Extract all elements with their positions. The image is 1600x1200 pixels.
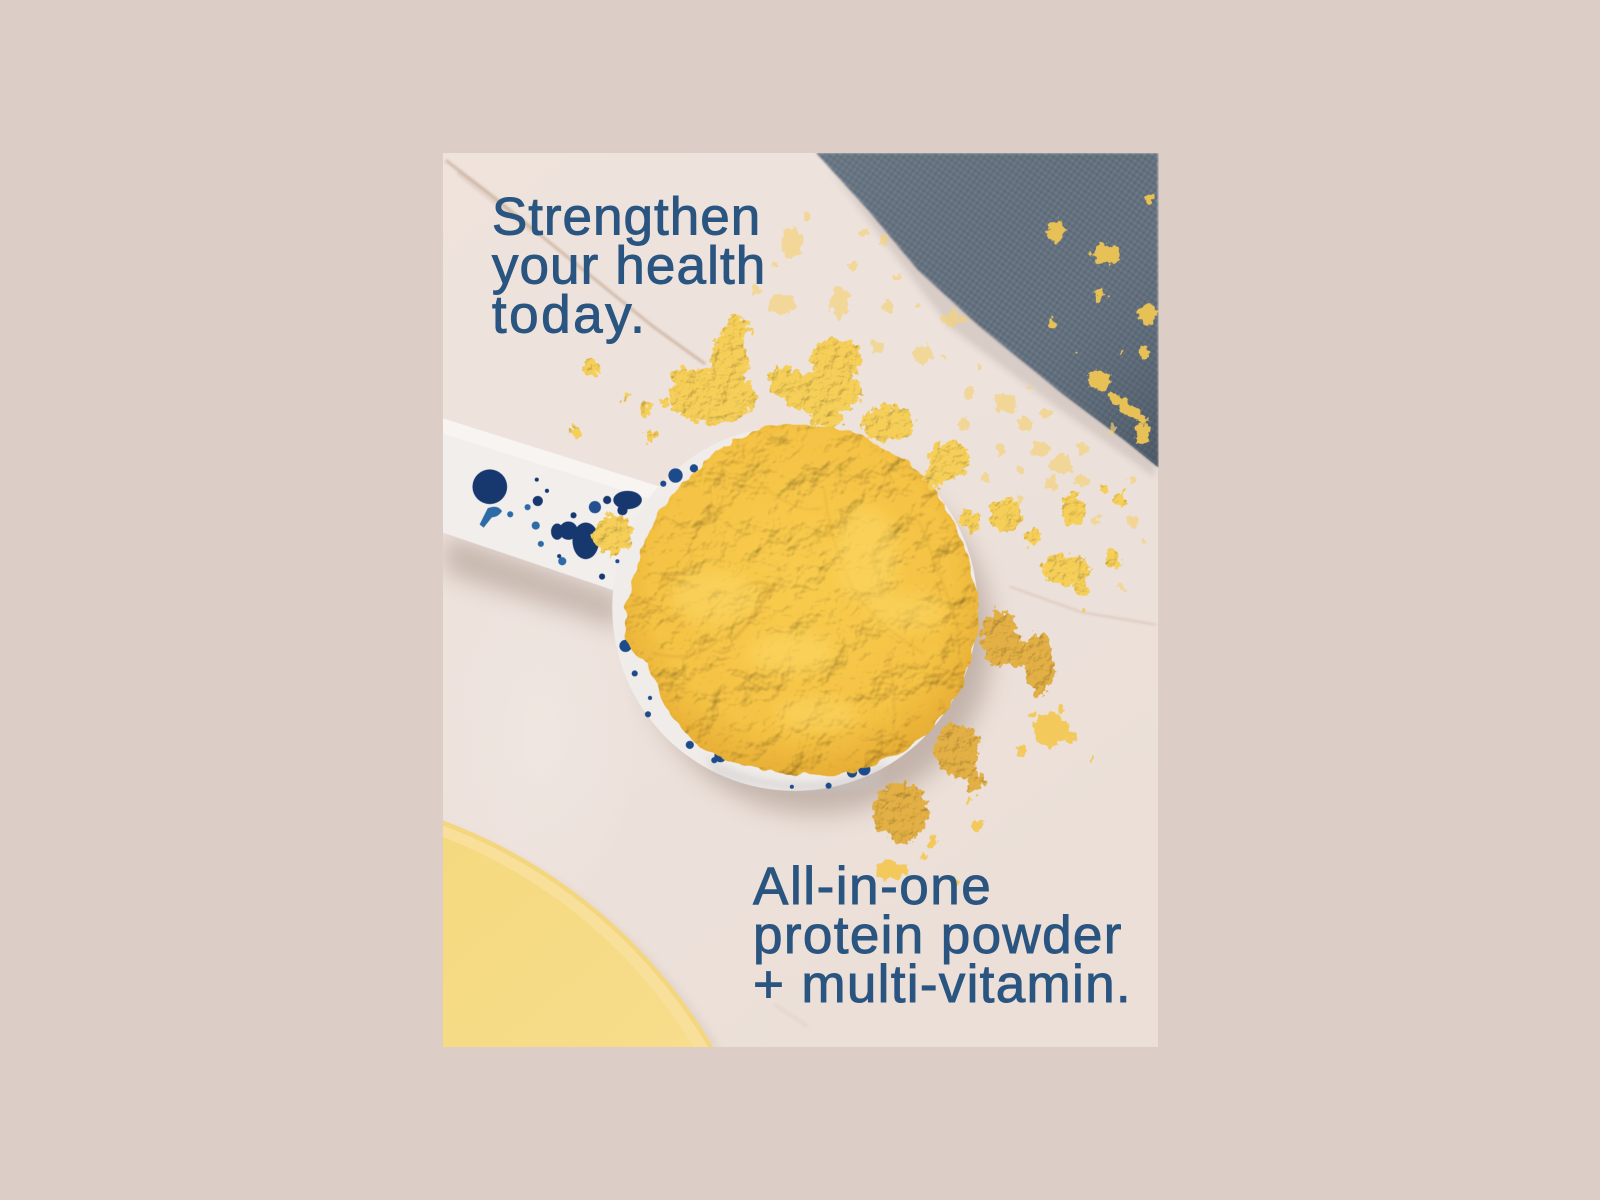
- powder creases: [654, 523, 930, 658]
- clump above scoop right: [861, 405, 1021, 532]
- scattered powder crumbs on marble: [568, 317, 1128, 596]
- line: today.: today.: [492, 286, 645, 345]
- infographic canvas: [443, 153, 1158, 1047]
- marble surface: [443, 153, 1158, 1047]
- clump above scoop centre: [768, 338, 862, 426]
- line: + multi-vitamin.: + multi-vitamin.: [753, 955, 1131, 1014]
- blue speckles on handle: [472, 469, 642, 580]
- shadow of spoon: [445, 462, 992, 813]
- heading: Strengthen your health today.: [492, 188, 765, 345]
- blue linen cloth: [816, 153, 1158, 478]
- clump above scoop left: [668, 317, 756, 423]
- blue speckles on bowl rim: [615, 464, 870, 789]
- small crumbs left: [568, 359, 667, 443]
- line: All-in-one: All-in-one: [753, 857, 991, 916]
- powder mound in scoop: [624, 424, 977, 774]
- tagline: All-in-one protein powder + multi-vitamin.: [753, 857, 1131, 1014]
- pale out-of-focus crumbs: [752, 212, 1146, 613]
- line: protein powder: protein powder: [753, 906, 1121, 965]
- line: Strengthen: Strengthen: [492, 188, 760, 247]
- lower powder crumbs: [876, 607, 1094, 885]
- panel: poster photograph: [443, 153, 1158, 1047]
- yellow plate: [443, 820, 719, 1047]
- crumb clump on handle: [594, 515, 633, 554]
- lighter powder lumps: [671, 507, 945, 731]
- darker shaded powder mounds near scoop: [872, 609, 1054, 844]
- right scatter: [1024, 484, 1128, 596]
- scoop bowl: [612, 426, 978, 792]
- line: your health: your health: [492, 237, 765, 296]
- powder on cloth: [1047, 193, 1156, 445]
- scoop handle: [443, 418, 663, 592]
